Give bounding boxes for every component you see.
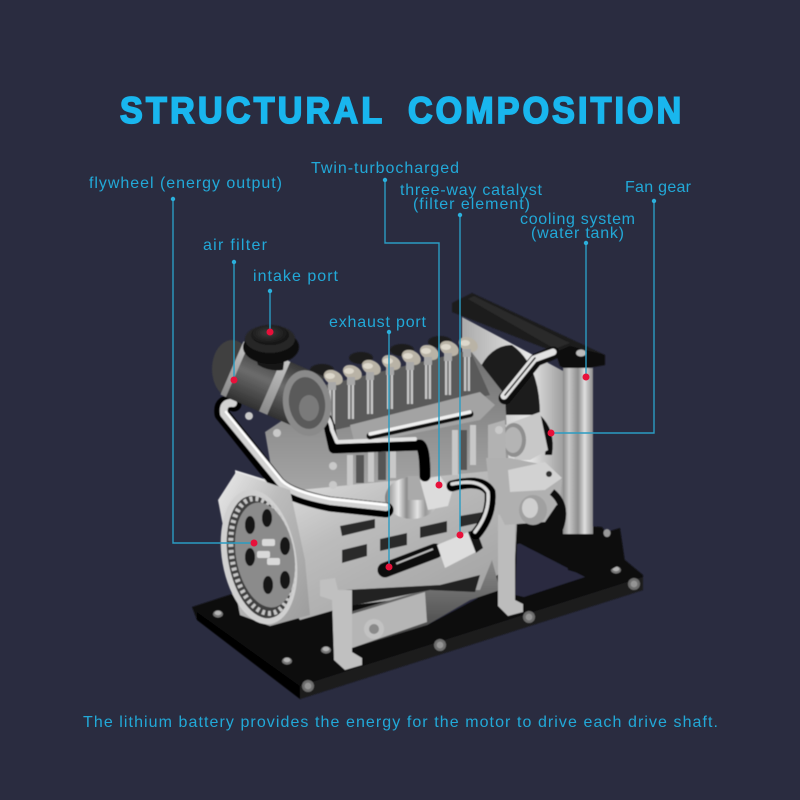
cooling column bbox=[561, 368, 625, 578]
leader lines bbox=[173, 180, 654, 567]
caption: The lithium battery provides the energy for the motor to drive each drive shaft. bbox=[83, 714, 718, 731]
base plate bbox=[192, 525, 643, 699]
label: exhaust port: exhaust port bbox=[329, 314, 427, 331]
fan gear bbox=[488, 412, 553, 470]
label: three-way catalyst: three-way catalyst bbox=[400, 182, 543, 199]
leader start dots bbox=[171, 178, 656, 334]
radiator top bar bbox=[452, 293, 605, 371]
crank block windows bbox=[340, 512, 483, 563]
label: intake port: intake port bbox=[253, 268, 339, 285]
pump assembly bbox=[486, 458, 563, 528]
engine illustration bbox=[192, 293, 643, 699]
label: air filter: air filter bbox=[203, 237, 268, 254]
title: STRUCTURAL bbox=[120, 90, 382, 131]
intake cap bbox=[243, 325, 299, 370]
rear engine bolts bbox=[245, 412, 503, 489]
red markers bbox=[230, 328, 590, 570]
chrome pipes bbox=[222, 352, 553, 534]
catalyst canister bbox=[380, 529, 483, 575]
front mounting legs bbox=[320, 510, 523, 670]
engine upper block bbox=[265, 350, 510, 520]
label: flywheel: flywheel (energy output) bbox=[89, 175, 282, 192]
rocker and valve row bbox=[310, 334, 495, 485]
label: water tank: (water tank) bbox=[531, 225, 624, 242]
turbocharger bbox=[385, 476, 452, 519]
flywheel bbox=[211, 472, 310, 630]
engine lower block bbox=[235, 470, 518, 620]
air filter bbox=[212, 340, 335, 439]
label: cooling system: cooling system bbox=[520, 211, 635, 228]
label: twin-turbocharged: Twin-turbocharged bbox=[311, 160, 459, 177]
title: COMPOSITION bbox=[408, 90, 681, 131]
label: filter element: (filter element) bbox=[413, 196, 530, 213]
radiator shroud bbox=[462, 317, 565, 545]
label: fan gear: Fan gear bbox=[625, 179, 692, 196]
oil pan bbox=[345, 560, 500, 648]
title bbox=[120, 90, 681, 131]
